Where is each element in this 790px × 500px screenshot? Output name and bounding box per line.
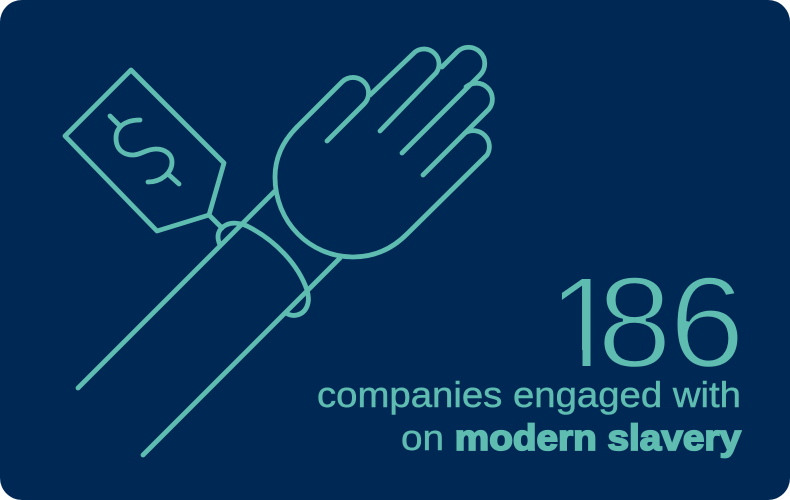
statistic: 186: 6 [669, 249, 745, 395]
icon: price tag with dollar sign [65, 70, 224, 231]
text: description line one: companies engaged with [317, 374, 741, 415]
icon: hand [275, 47, 492, 257]
text: description line two: on modern slavery [401, 417, 741, 458]
statistic: 186: 1 [548, 249, 620, 395]
statistic: 186 [548, 249, 745, 395]
statistic: 186: 8 [597, 249, 672, 395]
icon: arm with cuff [78, 191, 340, 455]
